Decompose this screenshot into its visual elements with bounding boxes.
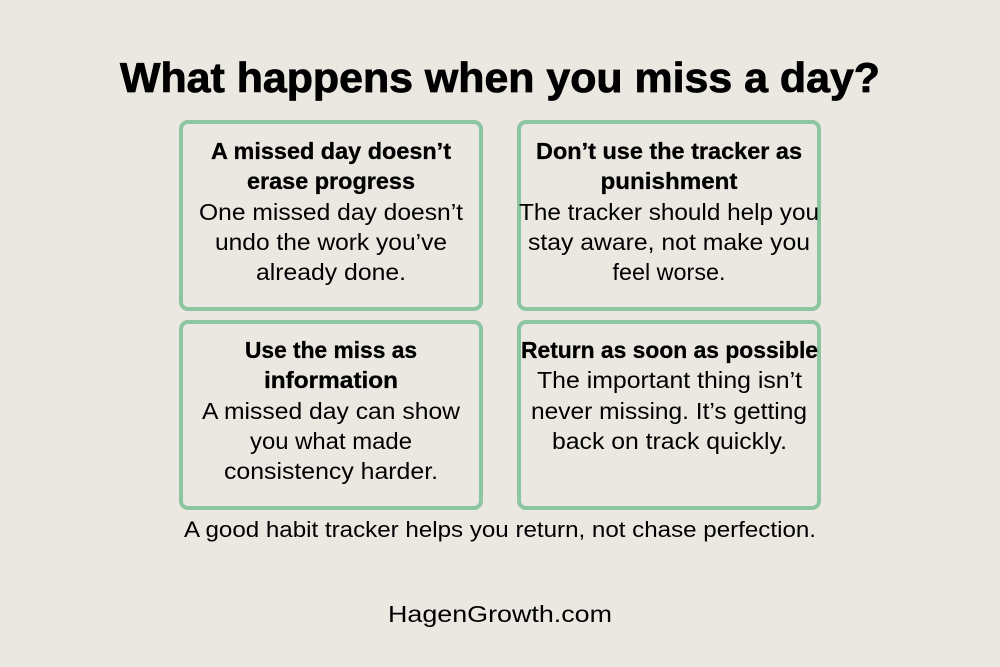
panel: don't use the tracker as punishment: [519, 122, 819, 309]
panel: use the miss as information: [181, 322, 481, 508]
panel: a missed day doesn't erase progress: [181, 122, 481, 309]
website credit: HagenGrowth.com: [388, 601, 612, 627]
panel heading: information: [264, 367, 398, 393]
panel heading: [245, 337, 417, 393]
panel body text: already done.: [256, 259, 406, 285]
panel body text: back on track quickly.: [552, 428, 787, 454]
panel body text: stay aware, not make you: [528, 229, 810, 255]
panel body text: consistency harder.: [224, 458, 438, 484]
panel body text: [199, 199, 464, 285]
panel body text: The important thing isn’t: [537, 367, 803, 393]
panel body text: A missed day can show: [202, 398, 460, 424]
panel heading: A missed day doesn’t: [211, 138, 451, 164]
panel body text: undo the work you’ve: [215, 229, 447, 255]
panel heading: punishment: [600, 168, 738, 194]
panel heading: [536, 138, 802, 194]
panel heading: Return as soon as possible: [521, 337, 818, 363]
panel body text: [202, 398, 460, 484]
panel body text: One missed day doesn’t: [199, 199, 464, 225]
panel body text: [519, 199, 819, 285]
panel heading: Use the miss as: [245, 337, 417, 363]
panel body text: [531, 367, 807, 454]
title: What happens when you miss a day?: [120, 54, 880, 101]
panel body text: never missing. It’s getting: [531, 398, 807, 424]
panel body text: you what made: [250, 428, 412, 454]
panel body text: The tracker should help you: [519, 199, 819, 225]
panel body text: feel worse.: [612, 259, 726, 285]
panel heading: Don’t use the tracker as: [536, 138, 802, 164]
panel heading: erase progress: [247, 168, 415, 194]
panel heading: [211, 138, 451, 194]
closing statement: A good habit tracker helps you return, not chase perfection.: [184, 517, 816, 542]
panel: return as soon as possible: [519, 322, 819, 508]
